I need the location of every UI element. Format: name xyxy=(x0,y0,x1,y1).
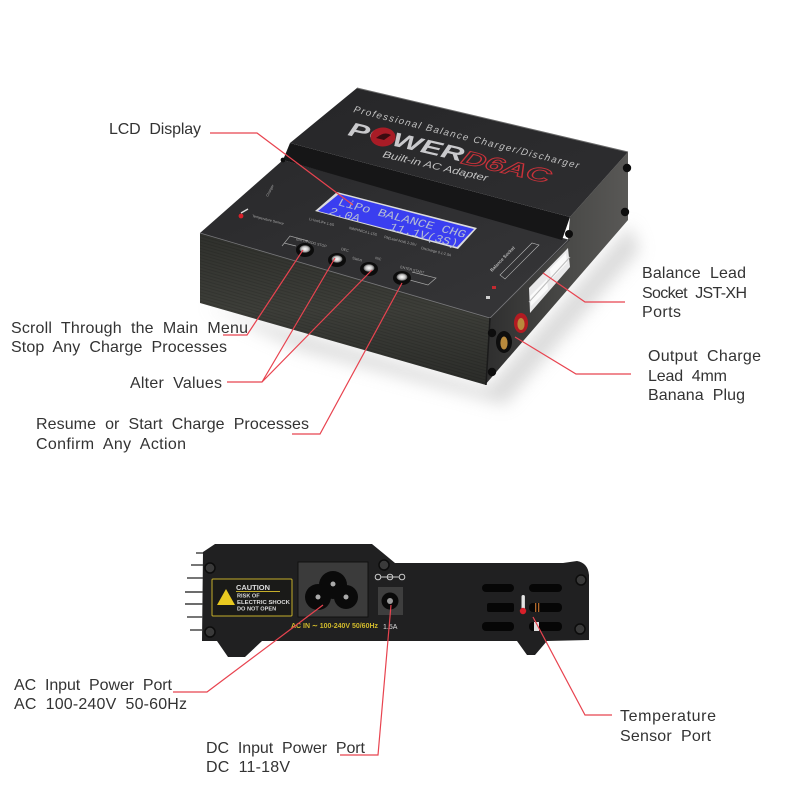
label: balance lead: Socket JST-XH xyxy=(642,285,747,302)
raised top panel xyxy=(290,88,628,217)
warning triangle xyxy=(217,589,235,605)
DC rating text: 1.5A xyxy=(383,624,398,631)
button outlines xyxy=(282,236,436,285)
leader: resume button xyxy=(292,283,402,434)
leader: temperature port xyxy=(533,617,612,715)
caution label: CAUTION xyxy=(236,585,270,592)
balance lead socket xyxy=(529,248,570,313)
label: scroll and stop: Scroll Through the Main Menu xyxy=(11,320,248,337)
DC polarity symbol xyxy=(375,574,405,580)
charger photo: top view xyxy=(200,88,640,405)
small panel labels: BATT/PROG STOP xyxy=(296,237,328,249)
small panel labels: Status xyxy=(352,256,363,262)
LCD text: 2.0A 11.1V(3S) xyxy=(326,205,461,250)
LCD bezel xyxy=(315,192,477,249)
label: balance lead: Balance Lead xyxy=(642,265,746,282)
small panel labels: INC xyxy=(375,256,382,262)
caution label xyxy=(212,579,292,616)
small panel labels: Pb(Lead Acid) 2-20V xyxy=(384,235,417,247)
small panel labels: DEC xyxy=(341,247,349,253)
rear screws xyxy=(205,560,586,637)
small panel labels: ENTER START xyxy=(400,265,425,275)
leader: output plug xyxy=(515,337,631,374)
small panel labels: Temperature Sensor xyxy=(252,214,285,226)
small panel labels: Discharge 0.1-2.0A xyxy=(421,246,452,258)
logo D6AC: D6AC xyxy=(458,147,555,188)
label: AC input xyxy=(14,677,187,713)
label: scroll and stop: Stop Any Charge Processes xyxy=(11,339,227,356)
label: AC input: AC 100-240V 50-60Hz xyxy=(14,696,187,713)
output label xyxy=(486,286,496,299)
label: AC input: AC Input Power Port xyxy=(14,677,173,694)
output banana plugs xyxy=(496,313,528,353)
logo POWER: POWER xyxy=(345,119,468,167)
lower top face xyxy=(200,160,570,318)
label: alter values: Alter Values xyxy=(130,375,222,392)
label: DC input: DC 11-18V xyxy=(206,759,290,776)
front face xyxy=(200,233,490,385)
leader: scroll button xyxy=(223,250,303,335)
rear casing xyxy=(202,544,589,657)
small panel labels: Li-Ion/LiFe 1-6S xyxy=(309,217,335,227)
LCD text: LiPo BALANCE CHG xyxy=(335,196,469,241)
label: temperature port: Temperature xyxy=(620,708,716,725)
temperature icon xyxy=(239,209,248,218)
balance socket label: Balance Socket xyxy=(489,245,516,273)
red leader lines xyxy=(173,133,631,755)
leader: DC port xyxy=(340,605,391,755)
leader: balance socket xyxy=(543,273,625,302)
label: temperature port: Sensor Port xyxy=(620,728,712,745)
temperature sensor icon xyxy=(520,595,526,614)
small panel labels: Charger xyxy=(265,183,275,197)
front face ribs xyxy=(200,233,490,385)
AC socket xyxy=(298,562,368,617)
leader: alter values xyxy=(227,258,372,382)
small panel labels xyxy=(252,183,452,275)
case screws xyxy=(281,158,631,376)
ventilation slots xyxy=(482,584,562,631)
label: temperature port xyxy=(620,708,716,745)
tagline: Professional Balance Charger/Discharger xyxy=(352,104,581,172)
balance socket label xyxy=(489,243,539,279)
label: resume or start xyxy=(36,416,309,453)
label: output charge xyxy=(648,348,761,404)
side fins xyxy=(185,553,203,630)
caution label: DO NOT OPEN xyxy=(237,606,276,612)
label: output charge: Banana Plug xyxy=(648,387,745,404)
drop shadow xyxy=(205,225,640,405)
caution label: ELECTRIC SHOCK xyxy=(237,600,290,606)
leader: AC port xyxy=(173,605,323,692)
label: LCD display: LCD Display xyxy=(109,121,201,138)
control buttons xyxy=(296,243,411,285)
label: output charge: Output Charge xyxy=(648,348,761,365)
LCD text xyxy=(326,196,469,250)
label: balance lead: Ports xyxy=(642,304,681,321)
label: output charge: Lead 4mm xyxy=(648,368,727,385)
label: resume or start: Resume or Start Charge Processes xyxy=(36,416,309,433)
leader: LCD display xyxy=(210,133,353,205)
built-in label: Built-in AC Adapter xyxy=(381,149,490,184)
charger photo: rear panel xyxy=(185,544,589,657)
LCD screen xyxy=(318,194,474,247)
small panel labels: NiMH/NiCd 1-15S xyxy=(349,226,378,237)
AC rating text: AC IN ∼ 100-240V 50/60Hz xyxy=(291,621,378,630)
logo red circle xyxy=(370,128,396,146)
label: scroll and stop xyxy=(11,320,248,356)
caution label: RISK OF xyxy=(237,594,260,600)
label: DC input: DC Input Power Port xyxy=(206,740,366,757)
right side face xyxy=(485,152,628,385)
label: balance lead xyxy=(642,265,747,321)
DC socket xyxy=(378,587,403,615)
label: resume or start: Confirm Any Action xyxy=(36,436,186,453)
raised panel slope xyxy=(283,143,570,240)
label: DC input xyxy=(206,740,366,776)
